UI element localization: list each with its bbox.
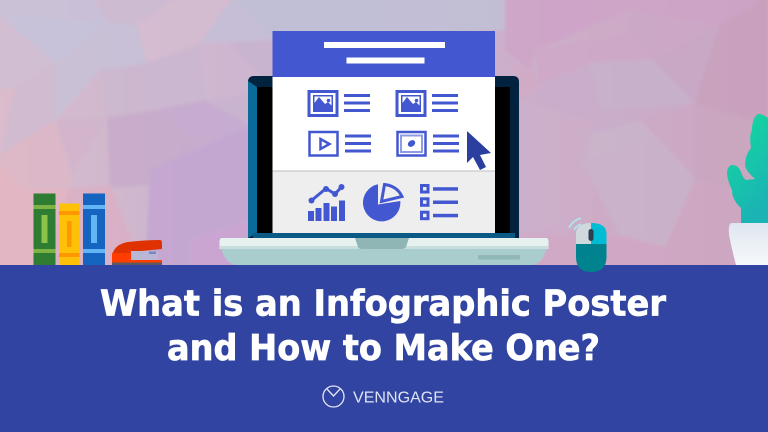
infographic sheet xyxy=(272,31,495,233)
sheet footer panel xyxy=(272,171,495,233)
bottom banner xyxy=(0,265,768,432)
book: yellow xyxy=(59,204,80,266)
icon: potted plant xyxy=(727,114,768,265)
plant pot xyxy=(729,223,768,265)
laptop screen frame xyxy=(248,76,519,238)
icon: checklist xyxy=(422,186,458,219)
sheet body xyxy=(272,77,495,171)
title: What is an Infographic Poster xyxy=(100,284,666,324)
book: green xyxy=(34,194,56,266)
trackpad slot xyxy=(478,255,520,260)
icon: video with lines xyxy=(310,132,371,156)
laptop base xyxy=(220,238,548,265)
plant leaves xyxy=(727,114,768,225)
header text bars xyxy=(324,42,445,48)
books xyxy=(34,194,105,266)
icon: image with lines 1 xyxy=(309,92,370,116)
sheet header xyxy=(272,31,495,77)
title: and How to Make One? xyxy=(167,328,600,369)
icon: image with lines 2 xyxy=(397,92,458,116)
icon: leaf picture with lines xyxy=(398,132,459,156)
book: blue xyxy=(83,194,105,266)
laptop xyxy=(219,76,549,265)
left side facets xyxy=(0,0,108,22)
right side facets xyxy=(505,0,768,70)
laptop hinge notch xyxy=(355,238,409,249)
icon: line and bar chart xyxy=(308,184,345,221)
top middle facets xyxy=(230,0,505,40)
logo wordmark: VENNGAGE xyxy=(353,390,444,406)
logo icon xyxy=(323,386,344,407)
icon: pie chart xyxy=(363,184,402,221)
title xyxy=(100,284,666,369)
icon: stapler xyxy=(112,240,162,266)
icon: wireless mouse xyxy=(569,218,606,272)
background: low-poly pastel pattern xyxy=(0,0,768,275)
logo: Venngage xyxy=(323,386,444,407)
icon: cursor arrow xyxy=(467,131,491,170)
